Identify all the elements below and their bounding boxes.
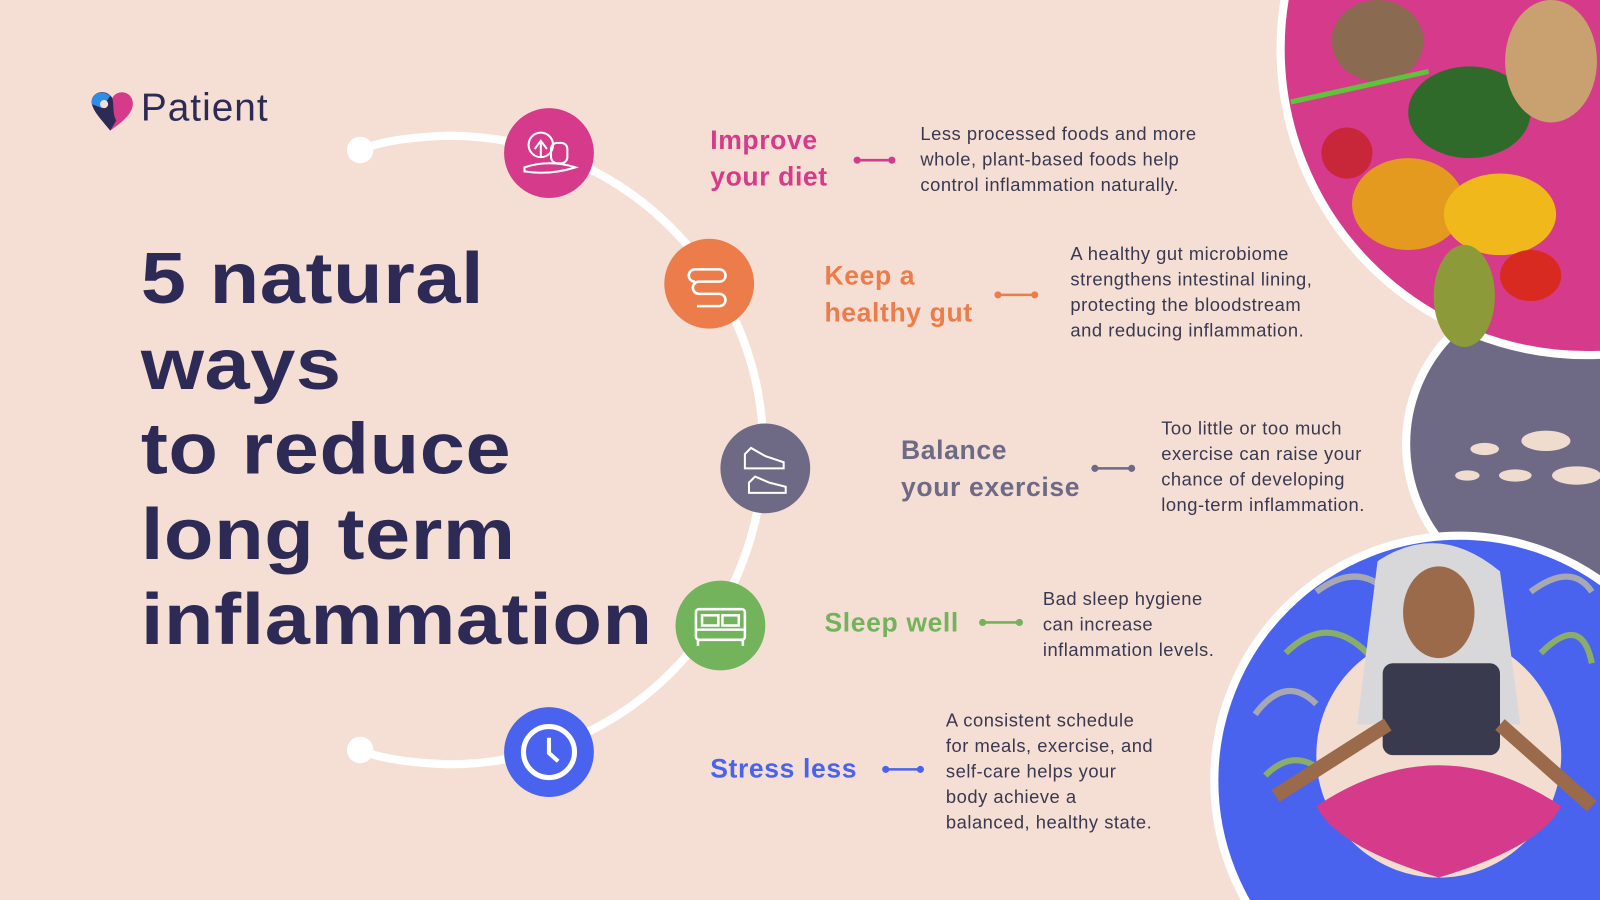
heading: gut: Keep a xyxy=(824,260,915,291)
connector: gut xyxy=(994,291,1038,298)
text: diet: whole, plant-based foods help xyxy=(920,149,1179,169)
text: stress xyxy=(946,710,1153,833)
logo: Patient xyxy=(141,87,269,130)
title: inflammation xyxy=(141,580,653,660)
text: stress: A consistent schedule xyxy=(946,710,1134,731)
text: stress: balanced, healthy state. xyxy=(946,812,1152,833)
text: diet: control inflammation naturally. xyxy=(920,174,1179,195)
title xyxy=(140,239,653,660)
text: exercise: chance of developing xyxy=(1161,469,1345,490)
connector: diet xyxy=(854,156,896,164)
heading: exercise xyxy=(901,435,1080,502)
text: sleep: can increase xyxy=(1043,614,1153,635)
text: gut: and reducing inflammation. xyxy=(1070,320,1304,341)
heading: gut xyxy=(824,260,973,328)
icon: exercise xyxy=(720,423,810,513)
connector: sleep xyxy=(979,618,1023,626)
icon: clock xyxy=(504,707,594,797)
gray exercise circle xyxy=(1406,289,1600,599)
heading: sleep: Sleep well xyxy=(824,607,959,638)
logo xyxy=(92,87,269,131)
title: ways xyxy=(141,324,342,405)
heading: stress: Stress less xyxy=(710,753,857,784)
text: exercise: long-term inflammation. xyxy=(1161,495,1365,515)
text: stress: for meals, exercise, and xyxy=(946,736,1153,756)
heading: diet xyxy=(710,124,828,192)
text: gut: protecting the bloodstream xyxy=(1070,295,1301,315)
heading: diet: Improve xyxy=(710,124,818,155)
heading: gut: healthy gut xyxy=(824,297,973,328)
text: sleep: Bad sleep hygiene xyxy=(1043,589,1203,609)
title: 5 natural xyxy=(141,239,484,319)
text: exercise: exercise can raise your xyxy=(1161,444,1362,464)
text: stress: self-care helps your xyxy=(946,761,1116,782)
text: gut xyxy=(1070,244,1312,341)
text: diet xyxy=(920,123,1197,195)
text: gut: A healthy gut microbiome xyxy=(1070,244,1289,264)
heading: exercise: your exercise xyxy=(901,471,1080,502)
title: to reduce xyxy=(141,409,511,490)
text: gut: strengthens intestinal lining, xyxy=(1070,269,1312,290)
heading: exercise: Balance xyxy=(901,435,1007,465)
icon: gut xyxy=(664,239,754,329)
heading: diet: your diet xyxy=(710,161,828,192)
connector: exercise xyxy=(1091,464,1136,472)
icon: diet xyxy=(504,108,594,198)
icon: sleep xyxy=(676,581,765,670)
blue meditation circle xyxy=(1214,536,1600,900)
text: exercise: Too little or too much xyxy=(1161,418,1342,439)
title: long term xyxy=(141,494,516,575)
connector: stress xyxy=(882,766,924,773)
pink food circle xyxy=(1281,0,1600,355)
text: stress: body achieve a xyxy=(946,787,1077,807)
text: sleep xyxy=(1043,589,1214,660)
text: exercise xyxy=(1161,418,1365,515)
text: diet: Less processed foods and more xyxy=(920,123,1197,144)
text: sleep: inflammation levels. xyxy=(1043,640,1214,660)
